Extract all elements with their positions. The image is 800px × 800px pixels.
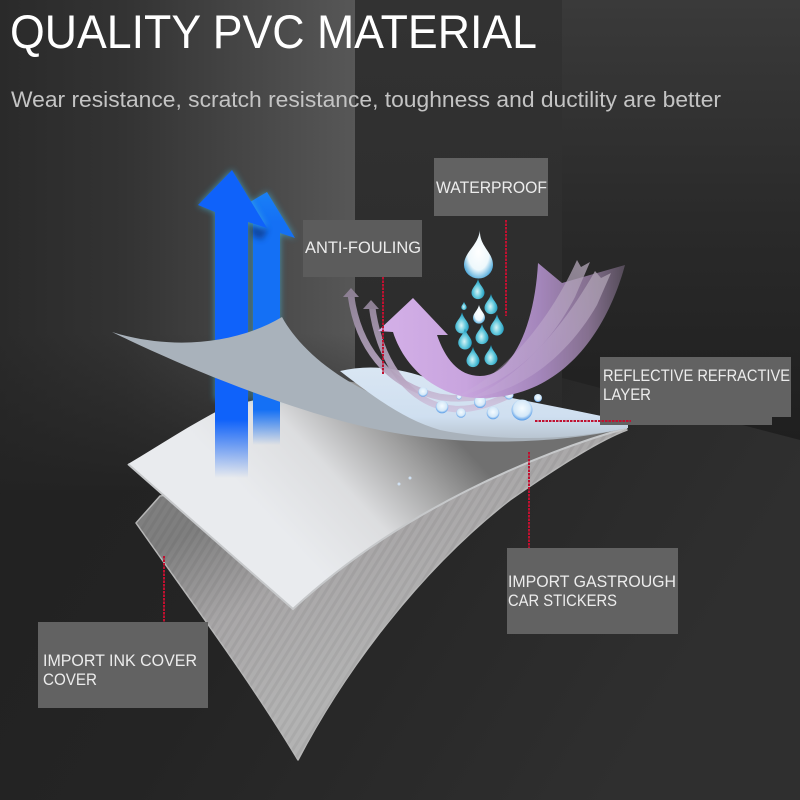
purple curved main arrow and sweep — [378, 263, 625, 398]
small drops — [455, 279, 504, 367]
label: import gastrough car stickers: CAR STICKERS — [508, 592, 617, 610]
thin reflected arrows, left — [343, 288, 510, 409]
label: import gastrough car stickers: IMPORT GASTROUGH — [508, 573, 676, 591]
arrow: front glow — [198, 170, 267, 400]
label: reflective refractive layer — [600, 357, 791, 425]
label: waterproof: WATERPROOF — [436, 179, 547, 197]
arrow: rear glow — [245, 192, 295, 400]
label: waterproof — [434, 158, 548, 216]
arrow: front blue — [198, 170, 267, 478]
light blue reflective layer — [340, 368, 628, 438]
curled grey-blue top sheet back — [112, 317, 628, 442]
label: reflective refractive layer: LAYER — [603, 386, 651, 404]
title: QUALITY PVC MATERIAL — [10, 5, 537, 58]
large drop — [464, 230, 493, 278]
label: import ink cover: IMPORT INK COVER — [43, 652, 197, 670]
label: import ink cover — [38, 622, 208, 708]
white middle sheet — [128, 380, 627, 609]
label: anti-fouling: ANTI-FOULING — [305, 239, 421, 257]
arrow: rear blue — [245, 192, 295, 445]
arrow: shadow under front head — [250, 224, 268, 240]
red dotted leader lines — [164, 220, 631, 622]
label: import ink cover: COVER — [43, 671, 97, 689]
pale sweep stripes — [455, 260, 611, 398]
blue arrows rising through the sheets — [198, 170, 295, 478]
water beads on the layer — [418, 387, 542, 420]
subtitle: Wear resistance, scratch resistance, toughness and ductility are better — [11, 87, 722, 112]
label: import gastrough car stickers — [507, 548, 678, 634]
label: anti-fouling — [303, 220, 422, 277]
carbon fibre bottom sheet — [136, 430, 627, 760]
water drops falling — [455, 230, 504, 367]
